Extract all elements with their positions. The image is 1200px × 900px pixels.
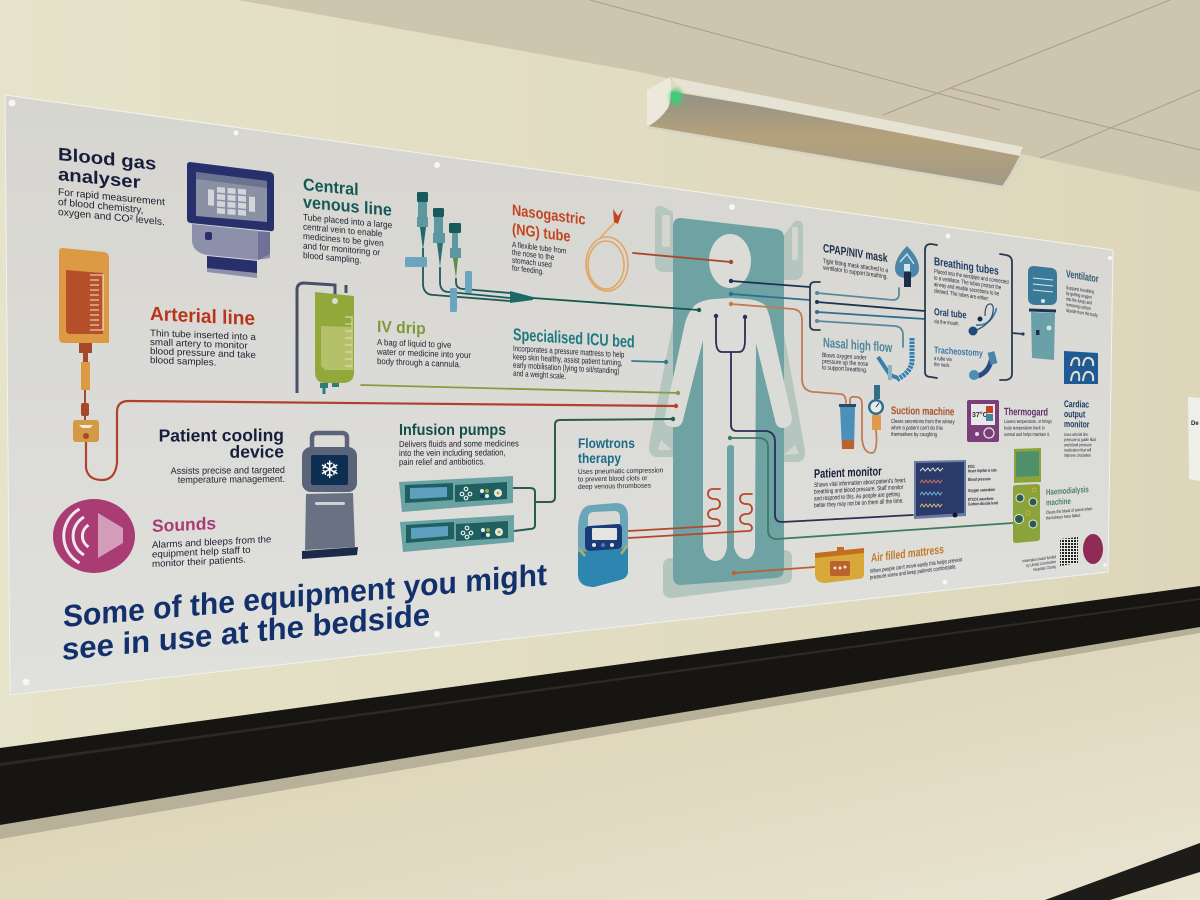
heading: patient cooling device: device [230, 441, 284, 462]
heading: nasogastric tube: Nasogastric [512, 202, 586, 229]
icon: oral tube [968, 304, 996, 336]
breathing bracket right [1000, 254, 1023, 380]
text: air filled mattress: When people can't move easily this helps prevent [870, 557, 963, 575]
heading: cardiac output monitor: Cardiac [1064, 399, 1089, 410]
icon: sounds [53, 499, 135, 573]
icon: air filled mattress [815, 547, 864, 583]
monitor labels: ETCO2 waveform [968, 496, 994, 502]
heading: infusion pumps: Infusion pumps [399, 421, 506, 439]
icon: patient cooling device: ❄ [319, 456, 340, 484]
text: arterial line: blood pressure and take [150, 346, 256, 361]
text: breathing tubes: Placed into the windpipe and connected [934, 268, 1009, 286]
monitor labels: Heart rhythm & rate [968, 468, 997, 474]
text: thermogard: body temperature back to [1004, 425, 1045, 431]
text: cardiac output monitor: Uses arterial line [1064, 431, 1088, 437]
icon: arterial line bag [59, 248, 109, 442]
line: air mattress [734, 567, 815, 573]
heading: haemodialysis machine: machine [1046, 496, 1071, 508]
line: mask [817, 288, 899, 300]
text: funder credit: Information board funded [1022, 555, 1056, 564]
line: flowtrons left [628, 489, 720, 531]
heading: thermogard: Thermogard [1004, 406, 1048, 418]
text: ventilator: into the lungs and [1066, 296, 1093, 306]
text: specialised ICU bed: early mobilisation (lying to sit/standing) [513, 360, 619, 376]
text: suction machine: Clears secretions from the airway [891, 418, 955, 426]
heading: central venous line: venous line [303, 192, 392, 220]
heading: tracheostomy: Tracheostomy [934, 344, 983, 359]
title [62, 557, 547, 667]
text: arterial line: small artery to monitor [150, 337, 248, 352]
heading: breathing tubes: Breathing tubes [934, 256, 999, 278]
text: central venous line: medicines to be given [303, 231, 384, 248]
text: CPAP/NIV mask: Tight fitting mask attached to a [823, 258, 889, 275]
heading: cardiac output monitor: output [1064, 409, 1085, 420]
line: flowtrons right [628, 494, 752, 538]
wall notice: De [1191, 421, 1199, 427]
text: breathing tubes: airway and enable secretions to be [934, 281, 999, 298]
text: cardiac output monitor: and blood pressure [1064, 442, 1092, 448]
text: patient monitor: and respond to this. As people are getting [814, 491, 900, 503]
text: central venous line: central vein to enable [303, 221, 383, 239]
line: haemodialysis [730, 438, 1013, 539]
text: sounds: Alarms and bleeps from the [152, 534, 271, 551]
icon: thermogard [967, 400, 999, 442]
text: arterial line: Thin tube inserted into a [150, 328, 257, 343]
text: funder credit: Hospitals Charity [1033, 565, 1056, 572]
text: sounds: monitor their patients. [152, 555, 246, 570]
heading: haemodialysis machine: Haemodialysis [1046, 484, 1089, 497]
text: central venous line: blood sampling. [303, 250, 362, 265]
wall notice [1188, 397, 1200, 481]
heading: central venous line: Central [303, 175, 359, 199]
icon: haemodialysis machine [1013, 448, 1041, 543]
icon: patient monitor [914, 460, 966, 519]
ceiling tiles [238, 0, 1200, 192]
heading: blood gas analyser: analyser [58, 165, 141, 193]
text: cardiac output monitor: improve circulation [1064, 452, 1091, 458]
charity logo [1083, 534, 1103, 564]
icon: blood gas analyser [187, 162, 274, 278]
heading: cardiac output monitor: monitor [1064, 419, 1090, 430]
heading: CPAP/NIV mask: CPAP/NIV mask [823, 243, 888, 266]
text: flowtrons therapy: deep venous thromboses [578, 482, 652, 491]
heading: specialised ICU bed: Specialised ICU bed [513, 325, 635, 352]
icon: tracheostomy [969, 352, 994, 380]
text: air filled mattress: pressure sores and keep patients comfortable. [870, 564, 957, 582]
icon: thermogard: 37°C [972, 411, 988, 419]
bed frame [649, 206, 805, 598]
line: ICU bed [632, 361, 666, 362]
text: IV drip: A bag of liquid to give [377, 337, 452, 350]
text: thermogard: normal and helps maintain it. [1004, 431, 1050, 437]
line: nasogastric [633, 253, 731, 262]
line: nasal [817, 321, 903, 347]
text: cardiac output monitor: pressure to guide fluid [1064, 436, 1096, 442]
text: patient monitor: better they may not be on them all the time. [814, 498, 904, 510]
dado rail [0, 586, 1200, 839]
line: high flow trunk [731, 294, 810, 300]
line: tube 2 [817, 312, 925, 319]
icon: nasogastric tube [586, 209, 628, 291]
text: specialised ICU bed: Incorporates a pressure mattress to help [513, 343, 624, 360]
text: ventilator: dioxide from the body. [1066, 307, 1098, 318]
icon: central venous catheter [405, 192, 533, 312]
heading: IV drip: IV drip [377, 318, 426, 338]
text: nasal high flow: pressure up the nose [822, 359, 868, 368]
text: nasogastric tube: for feeding. [512, 263, 544, 276]
text: central venous line: and for monitoring or [303, 240, 380, 258]
title: Some of the equipment you might [63, 557, 547, 634]
heading: flowtrons therapy: therapy [578, 450, 622, 466]
line: IV drip [361, 385, 678, 393]
heading: nasogastric tube: (NG) tube [512, 221, 571, 246]
text: central venous line: Tube placed into a large [303, 212, 392, 230]
heading: oral tube: Oral tube [934, 306, 967, 321]
heading: air filled mattress: Air filled mattress [871, 544, 944, 565]
heading: arterial line: Arterial line [150, 304, 255, 330]
line: infusion pumps [513, 419, 673, 531]
line: mask trunk [731, 281, 810, 287]
heading: sounds: Sounds [152, 513, 216, 536]
skirting rail [1045, 843, 1200, 900]
heading: blood gas analyser: Blood gas [58, 145, 156, 174]
icon: CPAP mask [895, 246, 919, 287]
text: infusion pumps: pain relief and antibiotics. [399, 457, 485, 467]
text: ventilator: by getting oxygen [1066, 290, 1092, 300]
text: flowtrons therapy: Uses pneumatic compression [578, 467, 663, 476]
catheter tubes [423, 248, 510, 301]
line: central venous [533, 298, 699, 310]
icon: patient cooling device [302, 433, 358, 559]
text: tracheostomy: the neck. [934, 361, 950, 369]
icon: IV drip [297, 283, 354, 394]
text: patient cooling device: Assists precise and targeted [171, 465, 285, 476]
heading: ventilator: Ventilator [1066, 268, 1099, 285]
line: arterial [86, 401, 676, 480]
icon: ventilator [1028, 266, 1057, 360]
text: specialised ICU bed: keep skin healthy, assist patient turning, [513, 351, 622, 368]
keypad [208, 186, 255, 217]
text: CPAP/NIV mask: ventilator to support breathing. [823, 265, 888, 281]
text: haemodialysis machine: Clears the blood of toxins when [1046, 506, 1092, 515]
airway bracket [810, 282, 820, 330]
icon: suction machine [839, 385, 884, 449]
text: nasogastric tube: the nose to the [512, 247, 554, 262]
text: arterial line: blood samples. [150, 355, 216, 368]
icon: nasal high flow [878, 338, 912, 380]
text: nasal high flow: Blows oxygen under [822, 352, 866, 362]
text: IV drip: body through a cannula. [377, 356, 461, 369]
text: suction machine: themselves by coughing. [891, 431, 938, 439]
text: nasogastric tube: A flexible tube from [512, 239, 566, 256]
text: funder credit: by United Lincolnshire [1026, 560, 1056, 568]
text: cardiac output monitor: medication that will [1064, 447, 1091, 453]
text: patient monitor: Shows vital information about patient's heart, [814, 477, 907, 489]
heading: suction machine: Suction machine [891, 405, 954, 419]
text: patient monitor: breathing and blood pressure. Staff monitor [814, 484, 903, 496]
text: nasogastric tube: stomach used [512, 255, 552, 270]
patient figure [664, 234, 792, 561]
lower wall [0, 627, 1200, 900]
poster panel [5, 95, 1113, 695]
text: ventilator: Supports breathing [1066, 284, 1094, 295]
monitor labels: Blood pressure [968, 477, 991, 482]
text: breathing tubes: cleared. The tubes are either: [934, 288, 989, 303]
connector lines [86, 244, 1023, 573]
text: blood gas analyser: For rapid measurement [58, 187, 165, 208]
text: specialised ICU bed: and a weight scale. [513, 368, 566, 381]
heading: nasal high flow: Nasal high flow [823, 335, 893, 356]
title: see in use at the bedside [62, 597, 430, 667]
text: oral tube: via the mouth. [934, 318, 959, 328]
monitor labels: ECG [968, 464, 975, 469]
monitor labels: Carbon dioxide level [968, 501, 998, 507]
light fixture [647, 77, 1023, 187]
icon: cardiac output monitor [1064, 351, 1098, 384]
text: infusion pumps: into the vein including sedation, [399, 448, 506, 458]
text: blood gas analyser: oxygen and CO² levels. [58, 207, 165, 228]
text: thermogard: Lowers temperature, or brings [1004, 418, 1053, 424]
text: blood gas analyser: of blood chemistry, [58, 197, 144, 216]
mattress [673, 218, 784, 585]
pump 2 [400, 515, 514, 552]
line: suction [731, 304, 876, 453]
monitor labels: Oxygen saturation [968, 487, 996, 493]
line: tube 1 [817, 302, 925, 311]
text: flowtrons therapy: to prevent blood clots or [578, 475, 648, 484]
text: nasal high flow: to support breathing. [822, 365, 868, 374]
stethoscope and monitor line [716, 316, 913, 522]
text: suction machine: when a patient can't do this [891, 425, 943, 432]
icon: infusion pumps [399, 476, 514, 552]
text: IV drip: water or medicine into your [376, 346, 471, 360]
connector dots [664, 260, 1025, 575]
screws [8, 100, 1112, 686]
breathing bracket left [925, 244, 937, 378]
QR code [1060, 537, 1078, 566]
heading: patient monitor: Patient monitor [814, 465, 882, 481]
pump 1 [399, 476, 513, 512]
text: sounds: equipment help staff to [152, 545, 251, 560]
text: breathing tubes: to a ventilator. The tubes protect the [934, 275, 1001, 292]
text: haemodialysis machine: the kidneys have failed. [1046, 512, 1081, 521]
heading: flowtrons therapy: Flowtrons [578, 435, 635, 451]
icon: flowtrons device [578, 503, 628, 587]
heading: patient cooling device: Patient cooling [159, 425, 284, 446]
text: tracheostomy: a tube via [934, 355, 952, 363]
text: ventilator: removing carbon [1066, 301, 1091, 311]
monitor labels [968, 464, 998, 507]
text: infusion pumps: Delivers fluids and some medicines [399, 439, 519, 449]
text: patient cooling device: temperature management. [178, 474, 285, 485]
